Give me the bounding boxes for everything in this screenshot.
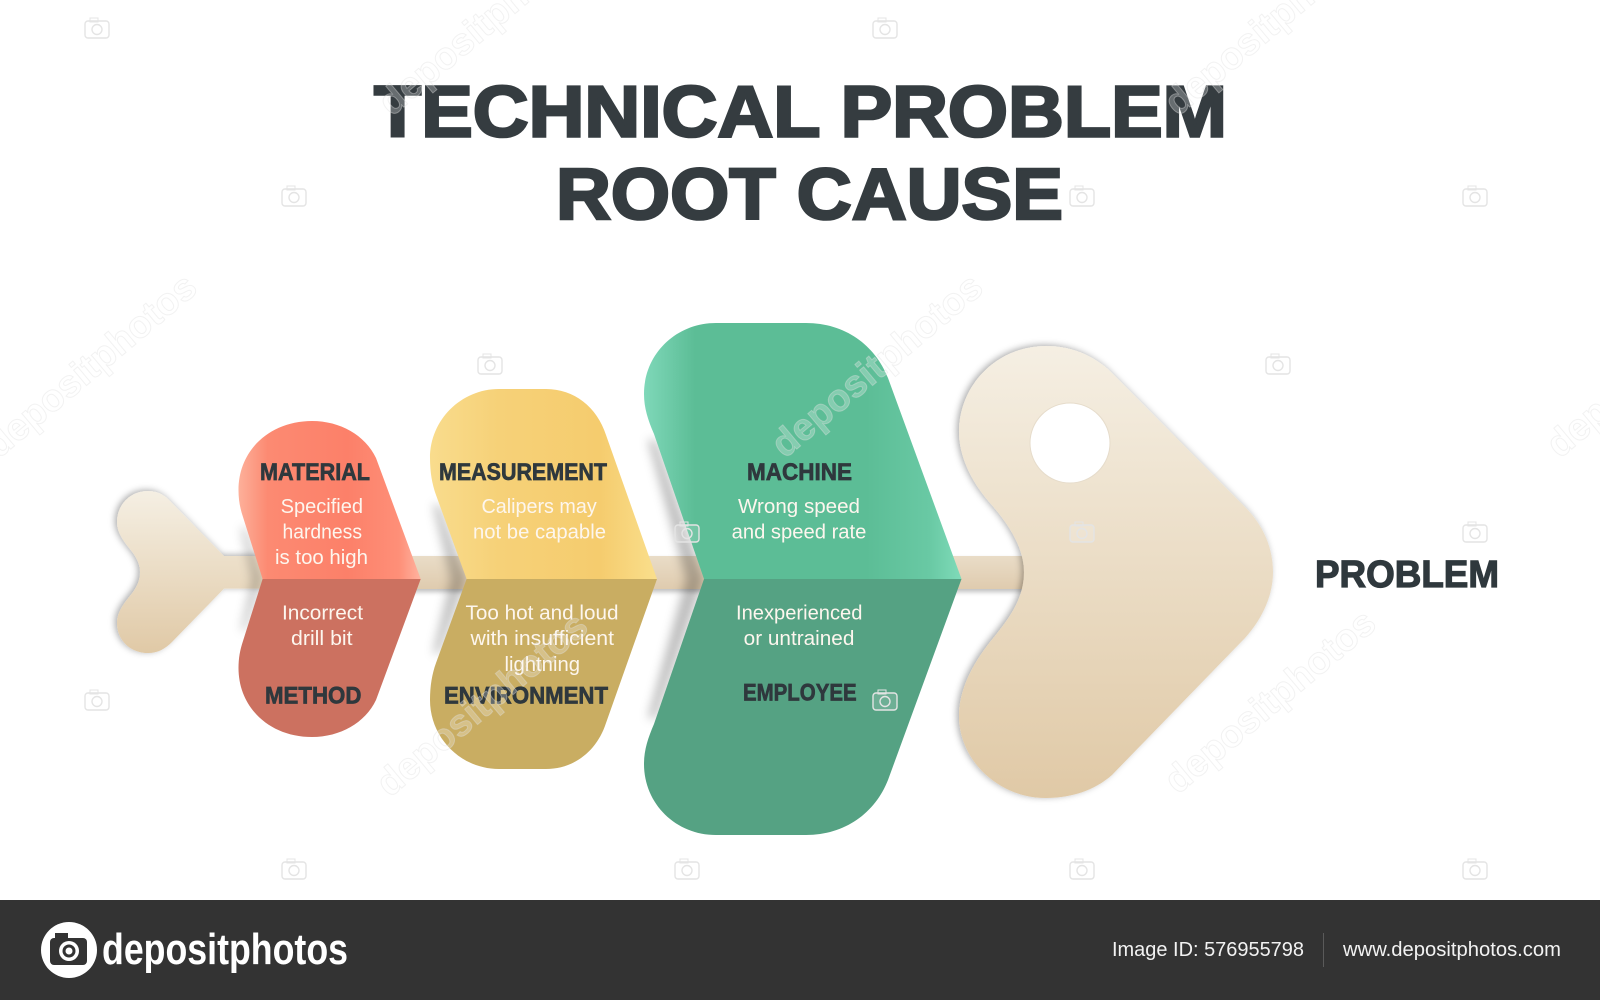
image id: Image ID: 576955798 <box>1112 939 1304 961</box>
environment shape <box>430 579 657 769</box>
watermark: depositphotos <box>1157 602 1384 802</box>
machine text <box>732 495 866 544</box>
website: www.depositphotos.com <box>1342 939 1561 961</box>
material shape <box>238 421 421 579</box>
employee shape <box>644 579 962 835</box>
panel: measurement and environment <box>430 389 657 769</box>
icon: camera logo <box>41 922 97 978</box>
method text: drill bit <box>291 627 353 650</box>
machine heading: MACHINE <box>747 459 852 486</box>
problem label: PROBLEM <box>1315 554 1499 596</box>
fish spine <box>268 556 1028 589</box>
panel: material and method <box>238 421 421 737</box>
material text <box>275 495 368 569</box>
fish tail <box>117 491 272 653</box>
measurement shape <box>430 389 657 579</box>
employee text: Inexperienced <box>736 602 862 625</box>
measurement text <box>473 495 606 544</box>
environment text <box>466 602 618 676</box>
measurement text: Calipers may <box>482 495 597 518</box>
machine shape <box>644 323 962 579</box>
watermark: depositphotos <box>764 266 991 466</box>
panel: machine and employee <box>644 323 962 835</box>
material text: Specified <box>281 495 363 518</box>
footer bar <box>0 900 1600 1000</box>
environment heading: ENVIRONMENT <box>444 683 608 710</box>
method text: Incorrect <box>282 602 363 625</box>
title <box>374 72 1227 235</box>
employee heading: EMPLOYEE <box>743 680 857 707</box>
machine text: Wrong speed <box>738 495 860 518</box>
method shape <box>238 579 421 737</box>
environment text: lightning <box>504 653 580 676</box>
title: TECHNICAL PROBLEM <box>374 72 1227 152</box>
measurement heading: MEASUREMENT <box>439 459 607 486</box>
machine text: and speed rate <box>732 521 866 544</box>
logo wordmark: depositphotos <box>102 925 348 974</box>
title: ROOT CAUSE <box>556 155 1063 235</box>
material heading: MATERIAL <box>260 459 370 486</box>
material text: hardness <box>282 521 362 544</box>
environment text: Too hot and loud <box>466 602 618 625</box>
material text: is too high <box>275 546 368 569</box>
fish head <box>959 346 1273 798</box>
environment text: with insufficient <box>469 627 614 650</box>
watermark: depositphotos <box>369 605 596 805</box>
measurement text: not be capable <box>473 521 606 544</box>
employee text: or untrained <box>744 627 854 650</box>
employee text <box>736 602 862 650</box>
fish eye <box>1030 403 1110 483</box>
method text <box>282 602 363 650</box>
watermark cameras <box>85 18 1487 879</box>
method heading: METHOD <box>265 683 361 710</box>
